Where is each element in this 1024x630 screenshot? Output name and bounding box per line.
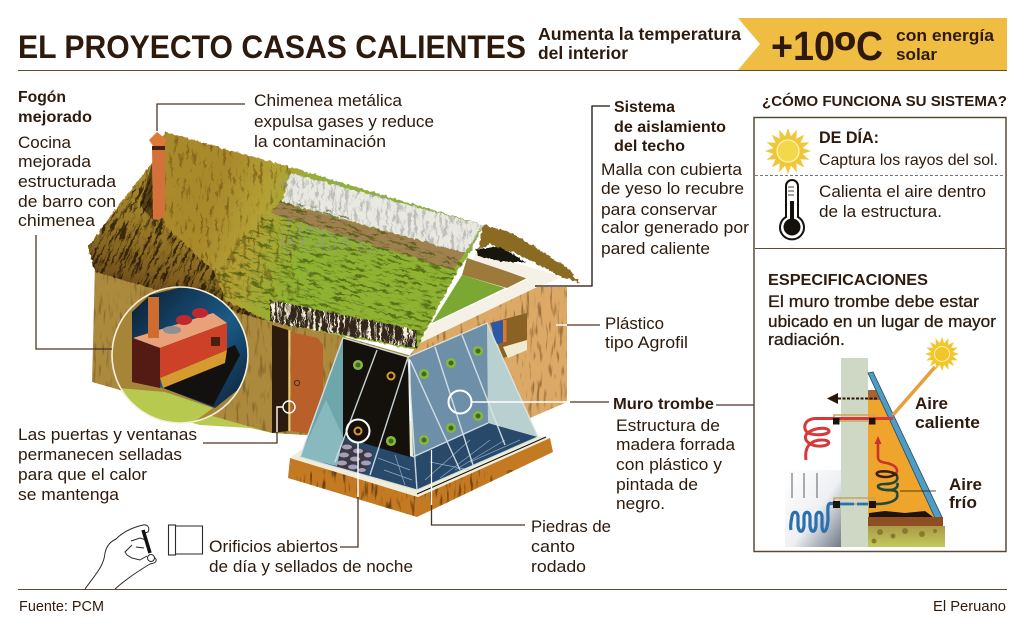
wall — [841, 358, 868, 547]
sun ray — [893, 367, 935, 415]
text: fogón mejorado: mejorado — [18, 109, 92, 126]
text: especificaciones — [768, 272, 996, 349]
text: muro trombe: Estructura de — [616, 416, 720, 435]
text: muro trombe: negro. — [616, 494, 665, 513]
temperature banner: con energía — [896, 26, 995, 45]
vents — [833, 418, 876, 508]
leader: fogón — [36, 235, 112, 349]
back thatch — [476, 225, 580, 283]
brown strip — [270, 202, 465, 270]
red air coil — [805, 418, 893, 460]
text: sistema de aislamiento: Sistema — [614, 99, 675, 116]
text: especificaciones: ESPECIFICACIONES — [768, 272, 928, 289]
dark straw texture — [88, 176, 264, 320]
base — [288, 438, 553, 517]
text: muro trombe: pintada de — [616, 475, 698, 494]
subtitle — [538, 24, 741, 63]
text: plástico: Plástico — [605, 314, 664, 333]
left side glass — [300, 338, 343, 466]
text: piedras — [531, 517, 611, 576]
stove inset — [110, 285, 250, 425]
icon: sun — [765, 128, 811, 174]
leader: sistema — [535, 106, 610, 286]
door — [272, 325, 323, 436]
temperature banner — [738, 18, 1007, 82]
leader: piedras — [432, 450, 525, 525]
text: sistema de aislamiento: calor generado por — [601, 218, 749, 237]
text: fogón mejorado: estructurada — [18, 172, 117, 191]
icon: plug cylinder — [168, 525, 202, 555]
eave band — [270, 300, 417, 348]
text: fogón mejorado: de barro con — [18, 192, 116, 211]
text: sistema de aislamiento: de aislamiento — [614, 119, 726, 136]
text: piedras: canto — [531, 537, 575, 556]
subtitle: del interior — [538, 43, 628, 63]
right glass face — [410, 323, 488, 457]
text: especificaciones: El muro trombe debe estar — [768, 292, 979, 311]
text: de día: DE DÍA: — [819, 128, 879, 147]
blue air pipe — [791, 504, 833, 531]
text: puertas y ventanas: Las puertas y ventanas — [18, 425, 197, 444]
text: fogón mejorado: Fogón — [18, 89, 66, 106]
warming air coil — [876, 441, 898, 504]
window — [490, 313, 527, 358]
leader: chimenea — [157, 104, 245, 131]
text: chimenea metálica: la contaminación — [254, 132, 386, 151]
labels: frío — [949, 494, 977, 512]
text: muro trombe: Muro trombe — [613, 396, 714, 413]
temperature banner: º — [834, 20, 856, 82]
text: chimenea metálica: Chimenea metálica — [254, 91, 403, 110]
icon: thermometer — [780, 180, 804, 239]
grass texture — [206, 195, 463, 349]
grey thatch — [282, 173, 483, 253]
text: plástico — [605, 314, 688, 352]
text: orificios — [209, 537, 413, 576]
labels: caliente — [915, 414, 980, 432]
leader: orificios — [340, 420, 370, 547]
hot air arrow — [827, 393, 877, 404]
text: chimenea metálica: expulsa gases y reduce — [254, 112, 434, 131]
black wall — [343, 338, 410, 457]
text: fogón mejorado: mejorada — [18, 152, 92, 171]
air chamber — [868, 390, 935, 517]
temperature banner: solar — [896, 45, 937, 64]
text: puertas y ventanas — [18, 425, 197, 504]
text: muro trombe — [613, 396, 736, 513]
front wall — [92, 270, 412, 436]
subtitle: Aumenta la temperatura — [538, 24, 741, 44]
footer line — [18, 588, 1007, 590]
text: sistema de aislamiento: de yeso lo recubre — [601, 179, 744, 198]
temperature banner: +10 — [771, 23, 835, 69]
text: muro trombe: madera forrada — [616, 435, 736, 454]
right side glass — [487, 323, 538, 437]
text: sistema de aislamiento: del techo — [614, 138, 685, 155]
trombe wall diagram — [785, 337, 982, 547]
chimney — [140, 132, 167, 220]
text: muro trombe: con plástico y — [616, 455, 723, 474]
icon: hand with plug — [85, 525, 156, 589]
lower left dark thatch — [85, 175, 270, 322]
floor reflections — [378, 440, 520, 485]
text: sistema de aislamiento: Malla con cubierta — [601, 160, 743, 179]
temperature banner: C — [856, 23, 883, 69]
title: EL PROYECTO CASAS CALIENTES — [18, 29, 526, 65]
text: fogón mejorado: Cocina — [18, 133, 72, 152]
text: de día — [819, 128, 998, 169]
text: puertas y ventanas: permanecen selladas — [18, 445, 182, 464]
labels — [915, 395, 982, 512]
text: calienta — [819, 182, 986, 221]
text: piedras: rodado — [531, 557, 586, 576]
leader: plástico — [556, 324, 600, 326]
right wall — [410, 287, 567, 425]
labels: Aire — [949, 476, 982, 494]
panel: how it works — [754, 118, 1006, 552]
text: especificaciones: ubicado en un lugar de mayor — [768, 312, 996, 331]
thin leader — [900, 490, 936, 492]
black absorber line — [878, 390, 935, 515]
text: chimenea metálica — [254, 91, 434, 151]
cold arrows — [792, 473, 817, 498]
frame lines — [300, 323, 538, 490]
credit: El Peruano — [933, 598, 1006, 615]
text: piedras: Piedras de — [531, 517, 611, 536]
cold exterior — [785, 470, 841, 547]
inner roof structure — [418, 252, 558, 344]
labels: Aire — [915, 395, 948, 413]
house illustration — [88, 131, 580, 517]
text: orificios: de día y sellados de noche — [209, 557, 413, 576]
text: plástico: tipo Agrofil — [605, 333, 688, 352]
sparse mustard straw — [130, 130, 300, 300]
panel heading: ¿CÓMO FUNCIONA SU SISTEMA? — [762, 92, 1007, 110]
text: especificaciones: radiación. — [768, 330, 845, 349]
leader: muro trombe — [448, 390, 754, 414]
vent holes — [354, 347, 482, 445]
text: orificios: Orificios abiertos — [209, 537, 338, 556]
glass — [868, 372, 942, 518]
small sun — [925, 337, 959, 371]
text: sistema de aislamiento: pared caliente — [601, 239, 710, 258]
text: puertas y ventanas: para que el calor — [18, 465, 147, 484]
text: sistema de aislamiento — [601, 99, 749, 258]
text: calienta: Calienta el aire dentro — [819, 182, 986, 201]
text: puertas y ventanas: se mantenga — [18, 485, 120, 504]
text: fogón mejorado: chimenea — [18, 211, 96, 230]
vent frames — [834, 415, 874, 504]
text: fogón mejorado — [18, 89, 117, 230]
gravel and soil — [869, 511, 933, 517]
ground shadow — [118, 388, 272, 433]
main roof — [88, 131, 484, 350]
source: Fuente: PCM — [19, 598, 104, 615]
text: calienta: de la estructura. — [819, 202, 942, 221]
text: de día: Captura los rayos del sol. — [819, 152, 998, 169]
trombe wall — [280, 323, 560, 525]
leader: puertas — [203, 401, 295, 443]
text: sistema de aislamiento: para conservar — [601, 200, 717, 219]
